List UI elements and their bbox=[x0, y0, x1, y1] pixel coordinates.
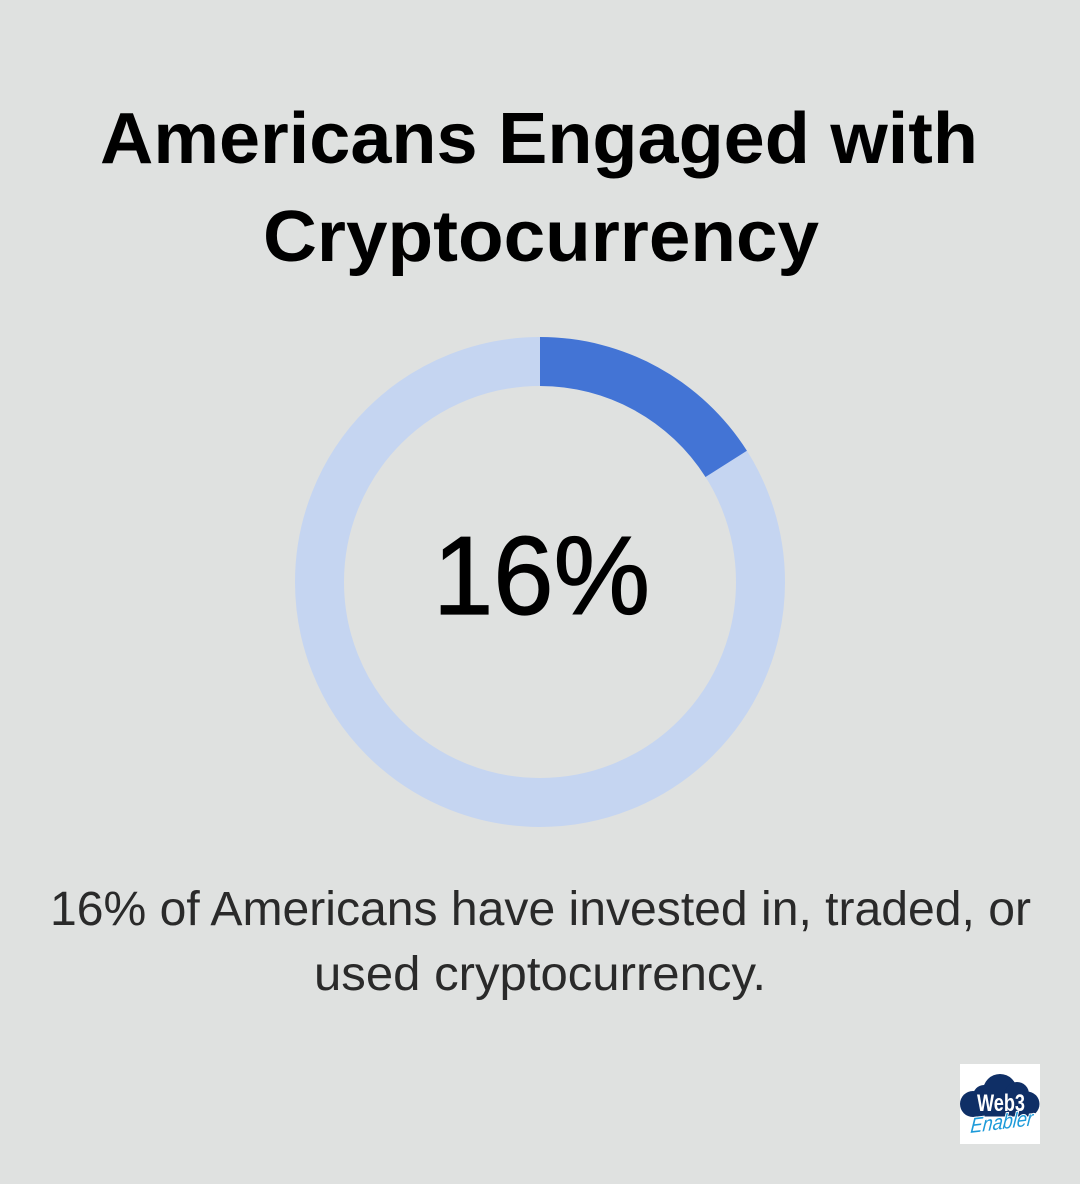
title bbox=[100, 99, 978, 277]
description text bbox=[50, 883, 1031, 1001]
center value: 16% bbox=[433, 514, 650, 638]
description text: used cryptocurrency. bbox=[314, 948, 766, 1001]
description text: 16% of Americans have invested in, traded, or bbox=[50, 883, 1031, 936]
icon: cloud bbox=[960, 1074, 1040, 1117]
logo wordmark: Web3 bbox=[977, 1090, 1025, 1117]
donut chart: 16 percent bbox=[320, 337, 760, 802]
title: Cryptocurrency bbox=[263, 197, 819, 277]
logo script: Enabler bbox=[970, 1107, 1035, 1138]
title: Americans Engaged with bbox=[100, 99, 978, 179]
logo: Web3 Enabler bbox=[960, 1064, 1040, 1144]
